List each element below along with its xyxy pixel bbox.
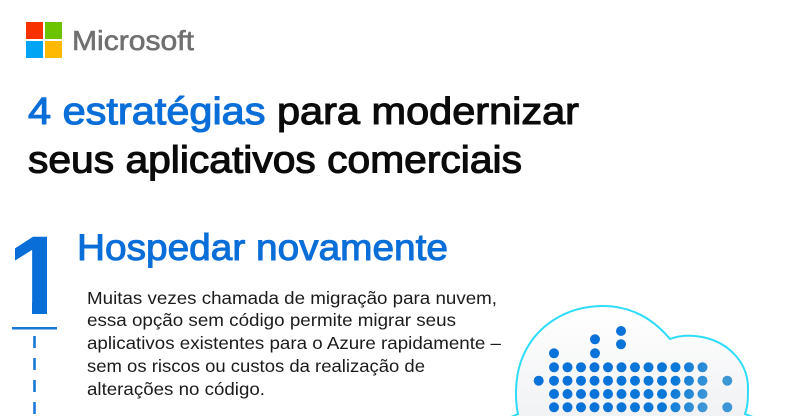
number 1: 1 bbox=[6, 213, 68, 338]
dashed line bbox=[33, 336, 36, 416]
cloud outline bbox=[511, 306, 753, 416]
underline bbox=[12, 327, 57, 330]
title: 4 estratégias para modernizar bbox=[28, 91, 579, 133]
Microsoft logo bbox=[26, 22, 194, 58]
data dots bbox=[534, 326, 732, 412]
wordmark: Microsoft bbox=[72, 25, 194, 56]
cloud fill bbox=[516, 306, 748, 416]
body text: essa opção sem código permite migrar seus bbox=[87, 310, 456, 330]
icon: Microsoft four squares bbox=[26, 22, 62, 58]
body text: alterações no código. bbox=[87, 379, 265, 399]
illustration: cloud with dots bbox=[511, 306, 753, 416]
section heading: Hospedar novamente bbox=[77, 227, 448, 268]
body text bbox=[87, 288, 501, 399]
body text: aplicativos existentes para o Azure rapidamente – bbox=[87, 333, 501, 353]
title: seus aplicativos comerciais bbox=[28, 140, 522, 182]
body text: Muitas vezes chamada de migração para nuvem, bbox=[87, 288, 497, 308]
title bbox=[28, 91, 579, 182]
body text: sem os riscos ou custos da realização de bbox=[87, 356, 425, 376]
